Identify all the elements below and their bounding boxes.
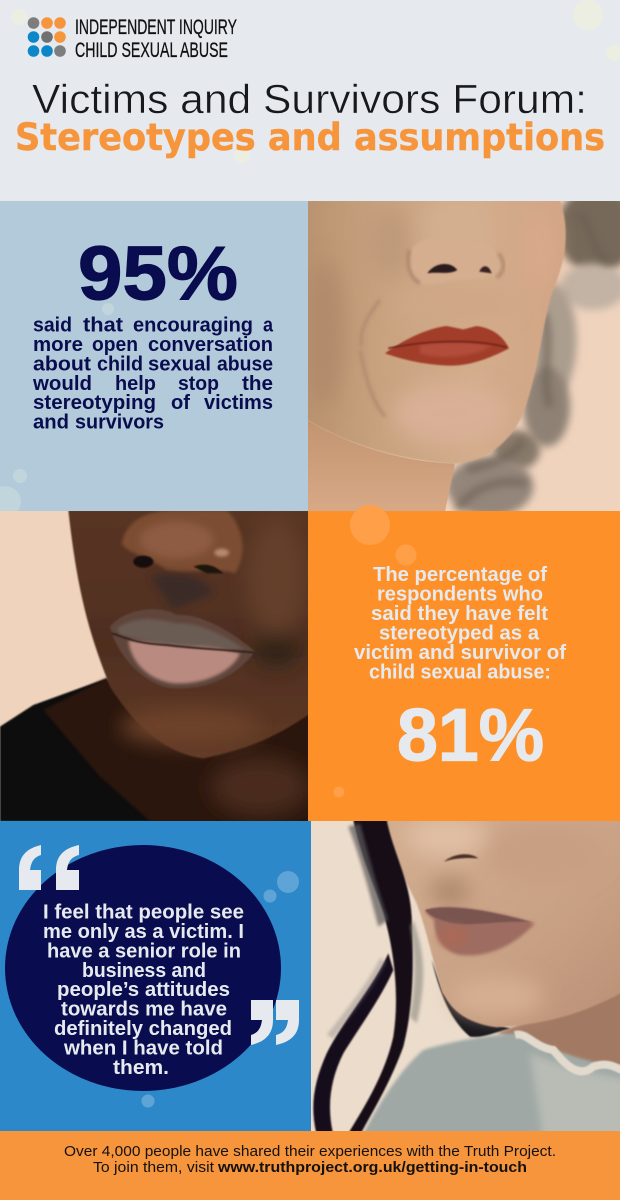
95 percent figure: 95% [78, 232, 238, 316]
logo text: CHILD SEXUAL ABUSE [75, 39, 228, 62]
statistic description: stop [178, 372, 219, 395]
quote text: definitely changed [54, 1017, 232, 1040]
statistic description: stereotyping [33, 391, 156, 414]
panel: 81 percent statistic [308, 505, 620, 821]
statistic description: child [97, 353, 143, 376]
closing quotation mark [251, 1000, 299, 1045]
nose [408, 239, 503, 285]
face [307, 200, 566, 463]
hair behind [432, 960, 510, 1037]
panel: survivor quote [0, 821, 311, 1131]
panel: footer [0, 1131, 620, 1200]
statistic description: The percentage of [373, 563, 547, 586]
statistic description [354, 563, 566, 683]
statistic description: victim and survivor of [354, 641, 566, 664]
hair [447, 187, 620, 517]
footer text: To join them, visit [93, 1159, 215, 1176]
81 percent figure: 81% [397, 694, 544, 776]
opening quotation mark [19, 845, 79, 890]
statistic description: open [92, 333, 138, 356]
statistic description: more [33, 333, 83, 356]
statistic description: a [263, 314, 274, 337]
statistic description: sexual [148, 353, 211, 376]
quote text: people’s attitudes [57, 978, 230, 1001]
lips [385, 326, 509, 366]
footer text [64, 1143, 556, 1176]
face [385, 820, 620, 1027]
statistic description: that [83, 314, 123, 337]
title: Victims and Survivors Forum: [32, 76, 587, 122]
statistic description: child sexual abuse: [369, 660, 551, 683]
logo text: INDEPENDENT INQUIRY [75, 16, 237, 39]
quote text: them. [113, 1056, 169, 1079]
sweater [360, 1033, 620, 1140]
black shirt [0, 678, 167, 822]
panel: header [0, 0, 620, 201]
nostril [444, 854, 478, 862]
quote text: I feel that people see [43, 901, 244, 924]
photo: woman with dark hair [310, 817, 620, 1140]
quote text: business and [82, 959, 206, 982]
panel bubbles [142, 871, 299, 1108]
neck [307, 420, 455, 512]
quote circle [5, 845, 281, 1091]
facial shading [303, 193, 557, 443]
nose [122, 510, 243, 610]
statistic description: stereotyped as a [379, 621, 540, 644]
statistic description: about [33, 353, 91, 376]
panel: 95 percent statistic [0, 201, 308, 518]
quote text: me only as a victim. I [43, 920, 244, 943]
title [15, 76, 605, 159]
statistic description: encouraging [133, 314, 253, 337]
quote text: towards me have [61, 997, 227, 1020]
statistic description: victims [204, 391, 273, 414]
panel bubbles [0, 303, 114, 518]
lips [425, 907, 535, 955]
quote text: have a senior role in [47, 939, 241, 962]
statistic description: the [242, 372, 273, 395]
statistic description: survivors [75, 411, 164, 434]
neck [43, 678, 320, 830]
title: Stereotypes and assumptions [15, 116, 605, 159]
panel bubbles [334, 505, 416, 798]
footer text: Over 4,000 people have shared their experiences with the Truth Project. [64, 1143, 556, 1160]
photo: man with stubble [0, 510, 320, 830]
neck [497, 992, 620, 1066]
statistic description [32, 314, 274, 434]
lips [110, 609, 255, 689]
statistic description: conversation [148, 333, 273, 356]
logo dots [28, 17, 66, 57]
statistic description: help [115, 372, 156, 395]
header bubbles [11, 0, 620, 163]
statistic description: of [171, 391, 190, 414]
face [68, 510, 320, 758]
quote text [43, 901, 244, 1079]
footer text: www.truthproject.org.uk/getting-in-touch [217, 1159, 527, 1176]
smile lines [360, 300, 385, 417]
photo: woman with red lipstick [303, 187, 620, 517]
statistic description: respondents who [377, 583, 543, 606]
statistic description: said they have felt [371, 602, 548, 625]
statistic description: would [32, 372, 92, 395]
collar ruffle [515, 1035, 620, 1072]
logo text [75, 16, 237, 62]
facial shading [407, 821, 540, 1032]
statistic description: abuse [217, 353, 273, 376]
facial shading [120, 517, 307, 745]
quote text: when I have told [63, 1036, 223, 1059]
logo [28, 16, 237, 62]
statistic description: and [33, 411, 69, 434]
hair strands [313, 820, 423, 1135]
statistic description: said [33, 314, 72, 337]
